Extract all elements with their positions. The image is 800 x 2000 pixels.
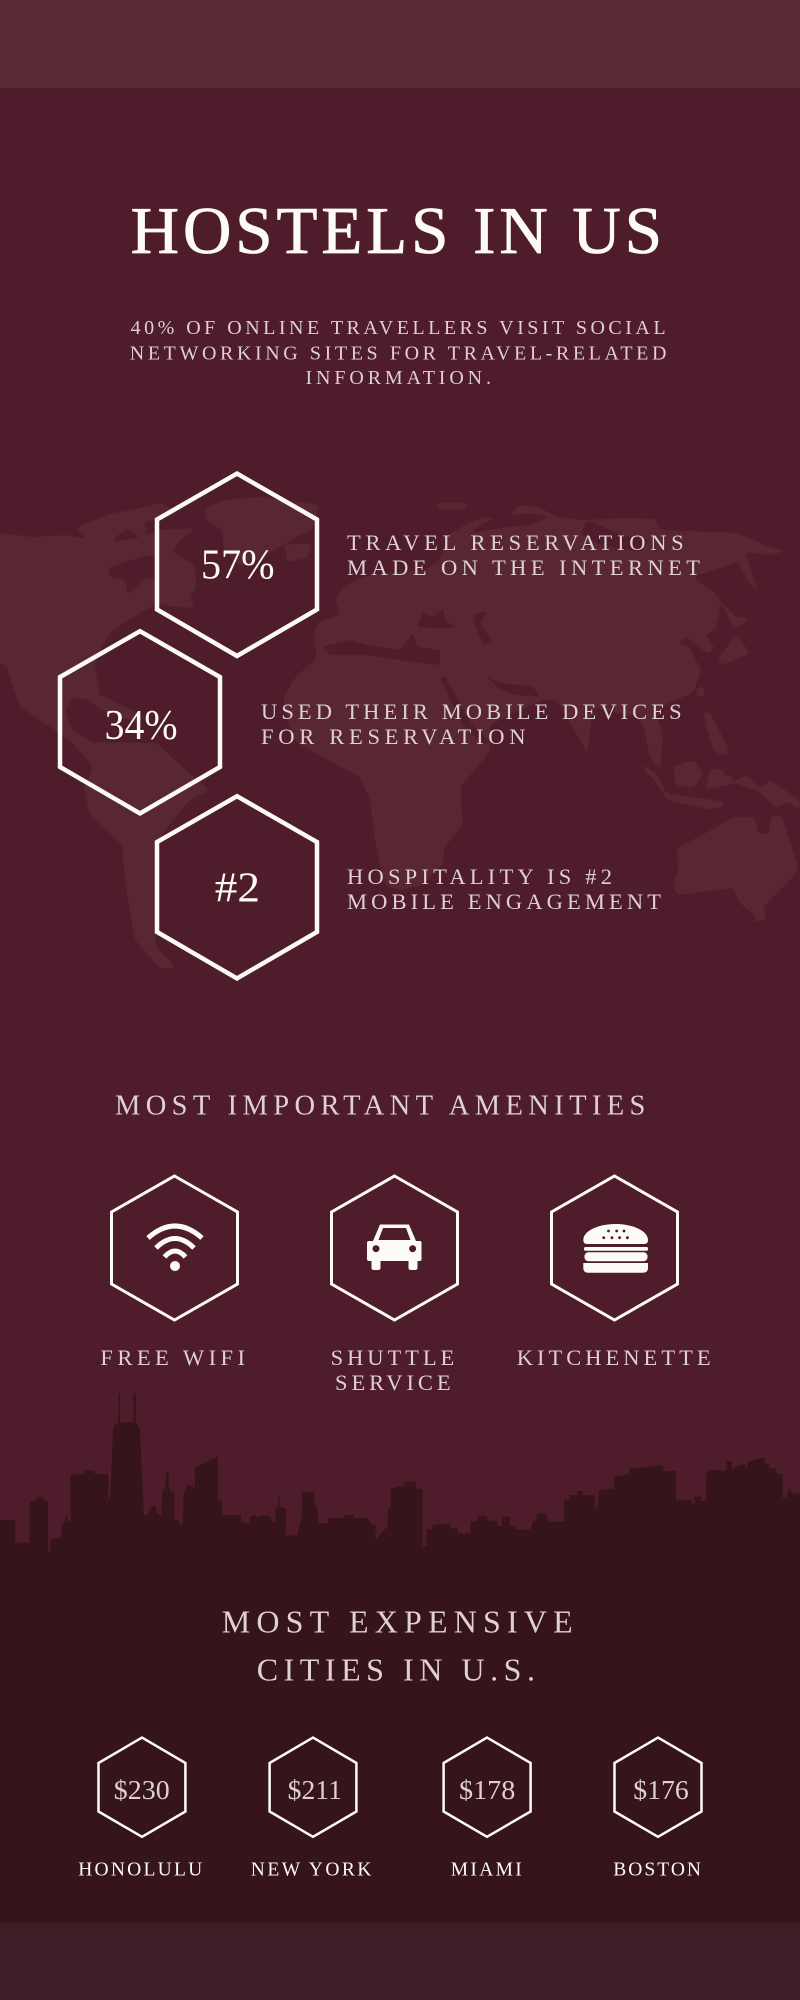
Australia — [673, 815, 798, 925]
city: Honolulu — [78, 1738, 202, 1881]
city: Miami: $178 — [459, 1775, 515, 1805]
Eurasia and Africa — [283, 505, 788, 890]
city: New York: NEW YORK — [251, 1860, 371, 1881]
stat: 57%: TRAVEL RESERVATIONS — [347, 530, 684, 555]
city: Boston — [613, 1738, 702, 1881]
amenity: shuttle service: SHUTTLE — [331, 1345, 454, 1370]
stat: #2: MOBILE ENGAGEMENT — [347, 889, 661, 914]
stat: #2: HOSPITALITY IS #2 — [347, 864, 612, 889]
expensive cities heading — [222, 1603, 573, 1687]
amenity: shuttle service — [331, 1176, 458, 1395]
top band — [0, 0, 800, 88]
Americas — [0, 528, 210, 968]
bottom band — [0, 1923, 800, 2000]
city: Boston: $176 — [633, 1775, 689, 1805]
expensive cities heading: CITIES IN U.S. — [257, 1651, 535, 1687]
stat: #2 — [157, 796, 661, 978]
city: Miami: MIAMI — [451, 1860, 522, 1881]
stat: #2: #2 — [215, 865, 260, 911]
city: Honolulu: HONOLULU — [78, 1860, 202, 1881]
stat: 57%: 57% — [201, 543, 274, 589]
amenity: kitchenette: KITCHENETTE — [517, 1345, 711, 1370]
city: New York: $211 — [288, 1775, 342, 1805]
amenity: shuttle service: SERVICE — [335, 1370, 451, 1395]
icon: burger — [583, 1224, 648, 1273]
icon: wifi — [148, 1226, 202, 1271]
icon: car — [367, 1224, 422, 1270]
stat: 34%: USED THEIR MOBILE DEVICES — [261, 699, 682, 724]
intro text: INFORMATION. — [306, 367, 491, 389]
intro text: NETWORKING SITES FOR TRAVEL-RELATED — [130, 342, 666, 364]
Indonesia and New Guinea — [635, 760, 800, 810]
city: Miami — [444, 1738, 531, 1881]
world map background — [0, 497, 800, 968]
amenity: free wifi: FREE WIFI — [100, 1345, 245, 1370]
stat: 57% — [157, 474, 700, 656]
stat: 57%: MADE ON THE INTERNET — [347, 555, 700, 580]
map water areas — [108, 513, 650, 745]
city: Boston: BOSTON — [613, 1860, 701, 1881]
amenity: kitchenette — [517, 1176, 711, 1370]
stat: 34%: FOR RESERVATION — [261, 724, 526, 749]
intro text — [130, 317, 666, 389]
city: New York — [251, 1738, 371, 1881]
amenity: free wifi — [100, 1176, 245, 1370]
amenities heading: MOST IMPORTANT AMENITIES — [115, 1090, 645, 1121]
city skyline silhouette and dark section — [0, 1393, 800, 1923]
stat: 34% — [60, 631, 682, 813]
city: Honolulu: $230 — [114, 1775, 170, 1805]
expensive cities heading: MOST EXPENSIVE — [222, 1603, 573, 1639]
intro text: 40% OF ONLINE TRAVELLERS VISIT SOCIAL — [131, 317, 666, 339]
title: HOSTELS IN US — [131, 194, 662, 268]
stat: 34%: 34% — [105, 703, 178, 749]
